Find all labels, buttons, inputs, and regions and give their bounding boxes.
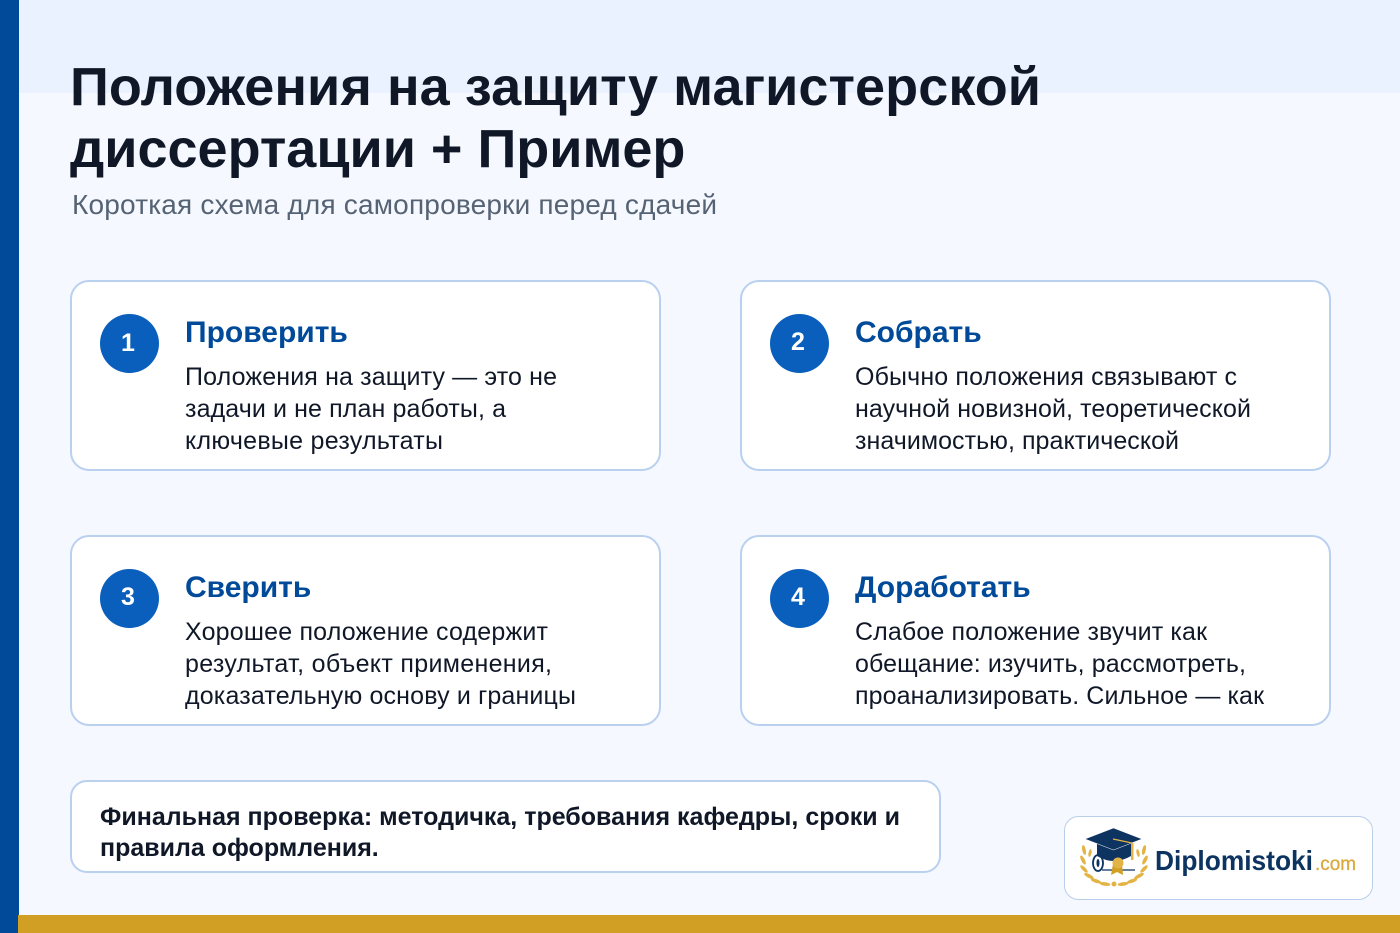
callout: final check: правила оформления. xyxy=(100,834,379,862)
panel: step 2 xyxy=(741,281,1330,470)
title: диссертации + Пример xyxy=(70,119,685,179)
text: step 2 body: значимостью, практической xyxy=(855,427,1179,455)
text: step 1 body: Положения на защиту — это не xyxy=(185,363,557,391)
heading: Сверить: Сверить xyxy=(185,571,311,604)
left accent bar xyxy=(0,0,19,933)
heading: Проверить: Проверить xyxy=(185,316,348,349)
text: step 2 body xyxy=(855,363,1251,455)
callout: final check xyxy=(71,781,940,872)
logo: Diplomistoki.com xyxy=(1064,816,1372,900)
bottom accent bar xyxy=(18,915,1400,933)
text: step 3 body: результат, объект применения, xyxy=(185,650,552,678)
text: step 1 body: ключевые результаты xyxy=(185,427,443,455)
text: step 2 body: научной новизной, теоретической xyxy=(855,395,1251,423)
icon: number 3: 3 xyxy=(121,583,135,611)
text: step 2 body: Обычно положения связывают с xyxy=(855,363,1237,391)
text: step 3 body: Хорошее положение содержит xyxy=(185,618,549,646)
text: step 4 body: Слабое положение звучит как xyxy=(855,618,1208,646)
icon: number 1: 1 xyxy=(121,329,135,357)
icon: number 4: 4 xyxy=(791,583,805,611)
panel: step 3 xyxy=(71,536,660,725)
text: step 4 body xyxy=(855,618,1265,710)
text: step 4 body: обещание: изучить, рассмотреть, xyxy=(855,650,1246,678)
text: step 1 body: задачи и не план работы, а xyxy=(185,395,506,423)
icon: number 3 xyxy=(100,569,159,628)
panel: step 4 xyxy=(741,536,1330,725)
heading: Собрать: Собрать xyxy=(855,316,982,349)
subtitle: Короткая схема для самопроверки перед сдачей xyxy=(72,189,717,220)
icon: graduation cap with laurel xyxy=(1079,828,1149,887)
panel: step 1 xyxy=(71,281,660,470)
icon: number 4 xyxy=(770,569,829,628)
text: step 1 body xyxy=(185,363,557,455)
icon: number 1 xyxy=(100,314,159,373)
text: step 3 body: доказательную основу и границы xyxy=(185,682,576,710)
icon: number 2 xyxy=(770,314,829,373)
icon: number 2: 2 xyxy=(791,328,805,356)
heading: Доработать: Доработать xyxy=(855,571,1031,604)
title xyxy=(70,57,1041,179)
wordmark: .com xyxy=(1315,854,1356,875)
callout: final check: Финальная проверка: методичка, требования кафедры, сроки и xyxy=(100,803,900,831)
text: step 3 body xyxy=(185,618,576,710)
wordmark: Diplomistoki xyxy=(1155,845,1313,876)
text: step 4 body: проанализировать. Сильное — как xyxy=(855,682,1265,710)
title: Положения на защиту магистерской xyxy=(70,57,1041,117)
